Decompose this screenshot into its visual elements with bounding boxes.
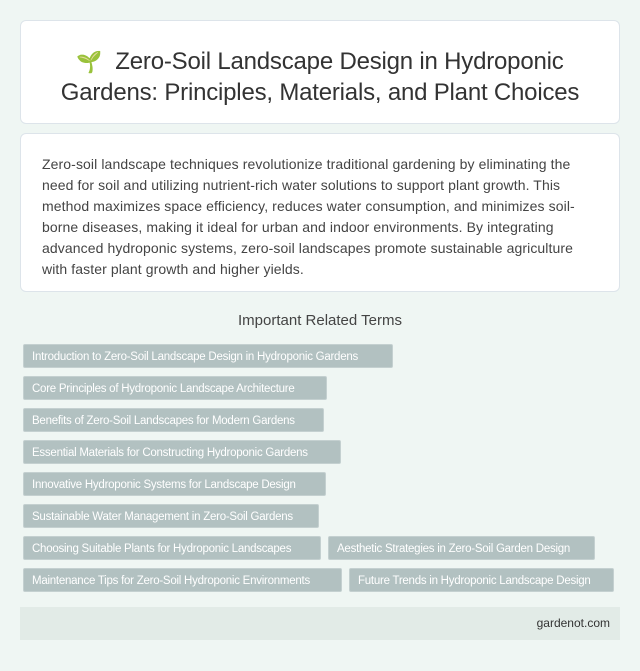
tag	[23, 344, 393, 368]
tag	[23, 472, 326, 496]
header card	[20, 20, 620, 124]
tag: Essential Materials for Constructing Hydroponic Gardens	[32, 447, 308, 459]
tag: Innovative Hydroponic Systems for Landscape Design	[32, 479, 296, 491]
description text	[42, 156, 575, 277]
tag: Choosing Suitable Plants for Hydroponic Landscapes	[32, 543, 291, 555]
description text: Zero-soil landscape techniques revolutionize traditional gardening by eliminating the	[42, 156, 570, 172]
description text: advanced hydroponic systems, zero-soil landscapes promote sustainable agriculture	[42, 240, 573, 256]
footer	[20, 607, 620, 640]
footer text: gardenot.com	[537, 616, 610, 630]
title: 🌱 Zero-Soil Landscape Design in Hydroponic	[76, 48, 564, 75]
tag: Future Trends in Hydroponic Landscape Design	[358, 575, 591, 587]
tag: Core Principles of Hydroponic Landscape Architecture	[32, 383, 295, 395]
tag	[23, 440, 341, 464]
description text: with faster plant growth and higher yields.	[42, 261, 304, 277]
description card	[20, 133, 620, 292]
description text: borne diseases, making it ideal for urban and indoor environments. By integrating	[42, 219, 554, 235]
tag	[328, 536, 595, 560]
tag	[23, 536, 321, 560]
tag: Benefits of Zero-Soil Landscapes for Modern Gardens	[32, 415, 295, 427]
tag: Introduction to Zero-Soil Landscape Design in Hydroponic Gardens	[32, 351, 358, 363]
tag	[23, 376, 327, 400]
tag	[23, 504, 319, 528]
heading: related terms: Important Related Terms	[238, 312, 402, 329]
tag	[23, 408, 324, 432]
title	[61, 48, 579, 106]
title: Gardens: Principles, Materials, and Plant Choices	[61, 79, 579, 106]
tag	[349, 568, 614, 592]
tag: Aesthetic Strategies in Zero-Soil Garden Design	[337, 543, 570, 555]
description text: method maximizes space efficiency, reduces water consumption, and minimizes soil-	[42, 198, 575, 214]
tag	[23, 568, 342, 592]
description text: need for soil and utilizing nutrient-rich water solutions to support plant growth. This	[42, 177, 560, 193]
tag: Sustainable Water Management in Zero-Soil Gardens	[32, 511, 293, 523]
tag: Maintenance Tips for Zero-Soil Hydroponic Environments	[32, 575, 310, 587]
